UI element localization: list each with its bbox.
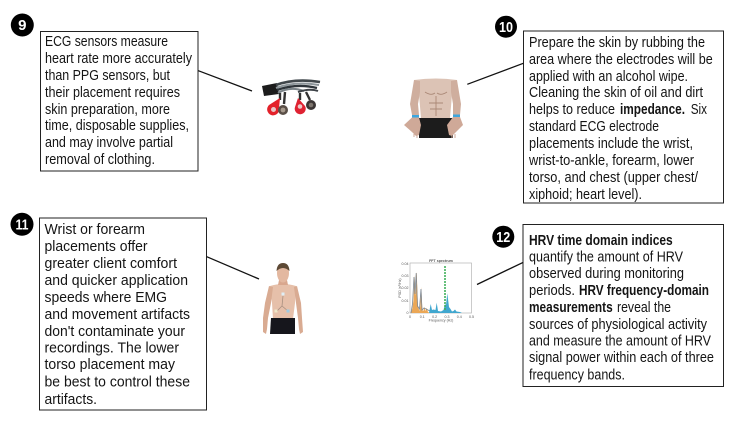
text box 11: and quicker application [44, 273, 188, 289]
text box 10: applied with an alcohol wipe. [529, 69, 688, 85]
number badge 11: 11 [16, 216, 28, 234]
text box 10: Prepare the skin by rubbing the [529, 35, 705, 51]
blue high-frequency band [429, 293, 462, 313]
text box 11: recordings. The lower [44, 340, 179, 356]
text box 10 [524, 31, 724, 203]
x axis tick labels: 0.1 [420, 315, 425, 319]
text box 10: torso, and chest (upper chest/ [529, 170, 699, 186]
panel 11: wrist or forearm placements [10, 213, 259, 410]
y axis tick labels: 0.01 [402, 299, 408, 303]
text box 11: Wrist or forearm [44, 222, 145, 238]
text box 9 [40, 32, 198, 171]
number badge 9: 9 [18, 17, 26, 34]
y axis tick labels [402, 262, 408, 315]
text box 11: and movement artifacts [44, 307, 190, 323]
text box 12: observed during monitoring [529, 266, 684, 282]
text box 9: ECG sensors measure [45, 34, 168, 50]
text box 12: signal power within each of three [529, 350, 714, 366]
x axis tick labels: 0.2 [432, 315, 437, 319]
text box 10: standard ECG electrode [529, 119, 659, 135]
text box 12: quantify the amount of HRV [529, 250, 683, 266]
text box 11 [40, 218, 206, 410]
text box 12: sources of physiological activity [529, 317, 708, 333]
y axis label: PSD (s²/Hz) [398, 278, 402, 298]
text box 12: measurements [529, 300, 613, 316]
plot frame [410, 263, 472, 313]
text box 12: periods. [529, 283, 575, 299]
image: torso with wrist electrodes [404, 78, 463, 138]
text box 9: and may involve partial [45, 135, 173, 151]
y axis tick labels: 0.04 [402, 262, 408, 266]
orange low-frequency band [411, 272, 430, 313]
grey spectrum trace [411, 273, 430, 313]
text box 9: their placement requires [45, 85, 180, 101]
x axis tick labels: 0.3 [444, 315, 450, 319]
connector line 12 [477, 262, 523, 284]
text box 12: frequency bands. [529, 368, 625, 384]
text box 11: torso placement may [44, 357, 176, 373]
text box 11: artifacts. [44, 392, 97, 408]
x axis tick labels: 0.5 [469, 315, 474, 319]
text box 10: placements include the wrist, [529, 136, 693, 152]
text box 11: greater client comfort [44, 256, 177, 272]
text box 9: heart rate more accurately [45, 51, 193, 67]
text box 11: don't contaminate your [44, 324, 185, 340]
text box 10: area where the electrodes will be [529, 52, 713, 68]
text box 12: HRV frequency-domain [579, 283, 709, 299]
panel 10: skin preparation [467, 16, 724, 203]
text box 11: placements offer [44, 239, 148, 255]
number badge 12: 12 [496, 229, 510, 246]
connector line 9 [198, 71, 252, 91]
text box 12: reveal the [617, 300, 671, 316]
text box 9: removal of clothing. [45, 152, 155, 168]
text box 12: HRV time domain indices [529, 233, 673, 249]
x axis tick labels: 0 [409, 315, 411, 319]
text box 11: be best to control these [44, 374, 190, 390]
text box 12: and measure the amount of HRV [529, 334, 711, 350]
y axis tick labels: 0 [406, 311, 408, 315]
chart: FFT spectrum [398, 259, 474, 322]
panel 12: HRV indices [477, 224, 724, 386]
text box 9: than PPG sensors, but [45, 68, 170, 84]
x axis tick labels [409, 315, 474, 319]
text box 10: xiphoid; heart level). [529, 187, 642, 203]
image: man with torso electrodes [263, 263, 303, 334]
chart title: FFT spectrum [429, 259, 453, 263]
x axis tick labels: 0.4 [457, 315, 462, 319]
text box 10: Cleaning the skin of oil and dirt [529, 85, 703, 101]
number badge 10 [495, 16, 517, 38]
text box 10: wrist-to-ankle, forearm, lower [528, 153, 694, 169]
text box 9: skin preparation, more [45, 102, 170, 118]
text box 10: helps to reduce [529, 102, 615, 118]
text box 9: time, disposable supplies, [45, 118, 189, 134]
connector line 10 [467, 63, 523, 84]
icon: ECG electrode cables [262, 81, 320, 115]
y axis tick labels: 0.02 [402, 286, 408, 290]
connector line 11 [207, 257, 259, 279]
x axis label: Frequency (Hz) [429, 318, 453, 322]
green dashed peak marker [444, 266, 446, 310]
number badge 9 [11, 14, 34, 36]
number badge 12 [492, 226, 514, 248]
number badge 10: 10 [499, 19, 513, 36]
panel 9: ECG sensors [11, 14, 252, 171]
text box 11: speeds where EMG [44, 290, 167, 306]
number badge 11 [10, 213, 34, 236]
text box 10: impedance. [620, 102, 685, 118]
text box 12 [523, 224, 724, 386]
y axis tick labels: 0.03 [402, 274, 408, 278]
text box 10: Six [691, 102, 708, 118]
